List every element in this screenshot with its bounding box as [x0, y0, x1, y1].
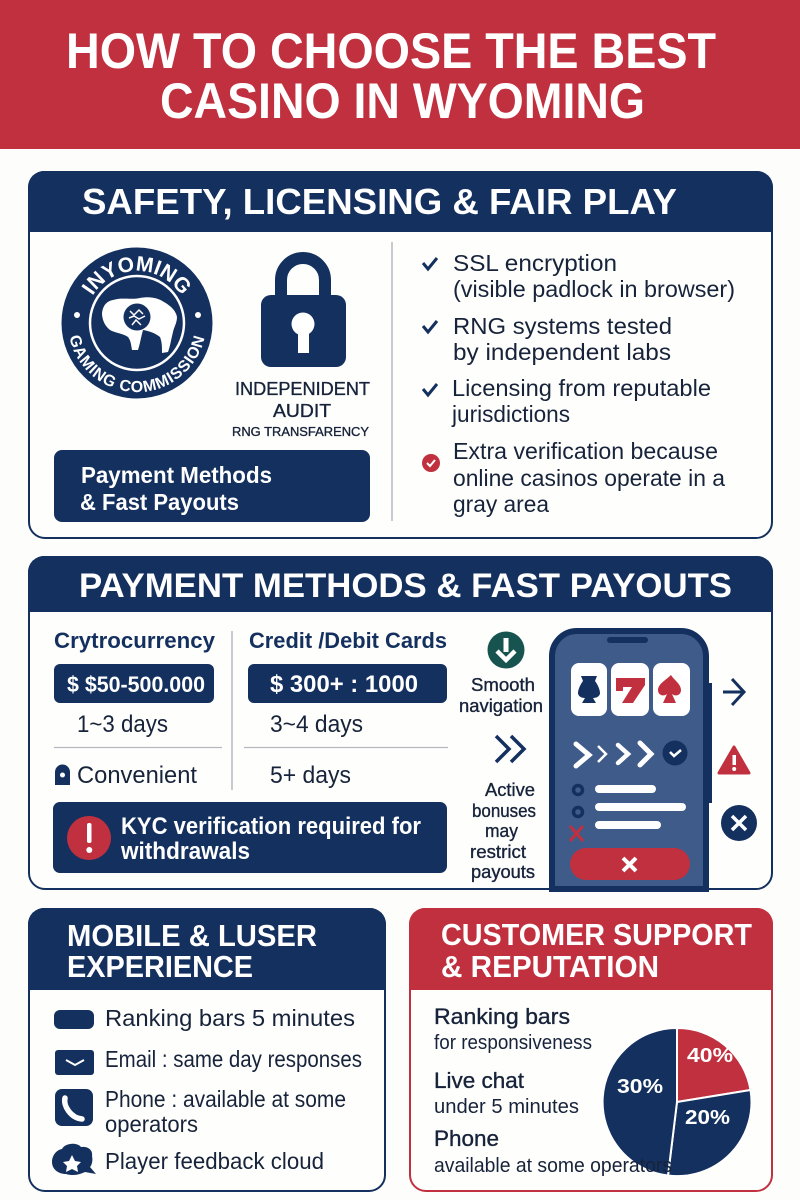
item: extra verification warning: online casinos operate in a	[453, 465, 725, 491]
checklist: safety points	[422, 250, 735, 517]
heading: safety: SAFETY, LICENSING & FAIR PLAY	[82, 181, 677, 222]
item: licensing: jurisdictions	[451, 401, 570, 427]
icon: warning triangle	[719, 747, 749, 773]
text: phone	[434, 1126, 672, 1177]
item: phone: operators	[105, 1111, 198, 1137]
text: ranking bars: Ranking bars	[434, 1004, 570, 1029]
heading: safety	[28, 171, 773, 232]
item: extra verification warning	[422, 438, 725, 517]
icon: small lock	[55, 765, 70, 785]
text: independent audit: AUDIT	[273, 401, 331, 421]
text: active bonuses	[470, 780, 536, 882]
item: licensing	[423, 375, 711, 427]
text: smooth navigation: Smooth	[471, 675, 535, 695]
item: SSL encryption: (visible padlock in browser)	[453, 276, 735, 302]
red cancel button	[570, 848, 690, 880]
text: phone: Phone	[434, 1126, 499, 1151]
column: cryptocurrency: Convenient	[77, 762, 197, 789]
icon: double chevron	[496, 736, 524, 762]
column: credit and debit cards: 5+ days	[270, 762, 351, 789]
item: phone	[55, 1086, 346, 1137]
text: independent audit: INDEPENIDENT	[235, 379, 370, 399]
column: credit and debit cards: Credit /Debit Cards	[249, 628, 447, 653]
text: ranking bars	[434, 1004, 592, 1054]
icon: smooth navigation	[488, 632, 524, 668]
item: licensing: Licensing from reputable	[452, 375, 711, 401]
heading: customer support	[409, 908, 773, 990]
item: email: Email : same day responses	[105, 1046, 362, 1072]
icon: arrow	[723, 679, 744, 705]
text: live chat: under 5 minutes	[434, 1096, 579, 1118]
text: ranking bars: for responsiveness	[434, 1032, 592, 1054]
callout: KYC verification	[53, 802, 447, 873]
text: live chat	[434, 1068, 579, 1118]
progress chevrons	[576, 740, 688, 766]
pie chart: 40%	[687, 1045, 733, 1067]
callout: payment methods and fast payouts: & Fast Payouts	[80, 489, 239, 515]
item: ranking bars: Ranking bars 5 minutes	[105, 1005, 355, 1031]
text: smooth navigation: navigation	[459, 696, 543, 716]
text: active bonuses: Active	[485, 780, 535, 800]
icon: Wyoming gaming commission seal	[62, 248, 212, 398]
item: extra verification warning: Extra verification because	[453, 438, 718, 464]
text: smooth navigation	[459, 675, 543, 716]
text: live chat: Live chat	[434, 1068, 524, 1093]
column: cryptocurrency	[54, 628, 222, 789]
pie chart: 30%	[617, 1076, 663, 1098]
icon: Wyoming gaming commission seal: INYOMING	[81, 256, 190, 295]
pie chart	[603, 1028, 751, 1176]
heading: payments: PAYMENT METHODS & FAST PAYOUTS	[79, 567, 732, 605]
title banner: HOW TO CHOOSE THE BEST	[66, 23, 716, 79]
panel: payment methods and fast payouts	[28, 556, 773, 889]
title banner: CASINO IN WYOMING	[160, 73, 645, 129]
text: active bonuses: payouts	[471, 862, 535, 882]
column: credit and debit cards: $ 300+ : 1000	[270, 671, 418, 698]
icon: close circle	[721, 805, 757, 841]
heading: customer support: CUSTOMER SUPPORT	[441, 917, 752, 952]
item: email	[55, 1046, 362, 1075]
icon: padlock	[261, 258, 346, 367]
callout: payment methods and fast payouts: Payment Methods	[81, 462, 272, 488]
text: independent audit	[232, 379, 370, 439]
text: active bonuses: may	[485, 821, 518, 841]
title banner	[0, 0, 800, 149]
pie chart: 20%	[685, 1107, 730, 1129]
heading: mobile: EXPERIENCE	[67, 949, 253, 984]
column: cryptocurrency: 1~3 days	[77, 711, 168, 738]
bullet lines	[570, 785, 686, 841]
column: credit and debit cards	[244, 628, 448, 789]
heading: customer support: & REPUTATION	[441, 949, 659, 984]
icon: Wyoming gaming commission seal: GAMING COMMISSION	[70, 336, 204, 392]
item: player feedback	[52, 1144, 324, 1175]
callout: KYC verification: withdrawals	[120, 838, 250, 865]
column: cryptocurrency: Crytrocurrency	[54, 628, 216, 653]
item: RNG systems: by independent labs	[453, 339, 671, 365]
slot reels	[571, 663, 690, 716]
panel: customer support and reputation	[409, 908, 773, 1191]
item: phone: Phone : available at some	[105, 1086, 346, 1112]
heading: mobile	[28, 908, 386, 990]
phone mockup	[552, 631, 712, 889]
callout: payment methods and fast payouts	[54, 450, 370, 522]
item: SSL encryption	[423, 250, 735, 302]
column: credit and debit cards: 3~4 days	[270, 711, 363, 738]
panel: mobile and user experience	[28, 908, 386, 1191]
item: player feedback: Player feedback cloud	[105, 1148, 324, 1174]
item: RNG systems	[423, 313, 672, 365]
item: extra verification warning: gray area	[453, 491, 549, 517]
heading: payments	[28, 556, 773, 612]
item: RNG systems: RNG systems tested	[453, 313, 672, 339]
item: SSL encryption: SSL encryption	[453, 250, 617, 276]
text: independent audit: RNG TRANSFARENCY	[232, 424, 369, 439]
column: cryptocurrency: $ $50-500.000	[67, 672, 205, 697]
heading: mobile: MOBILE & LUSER	[67, 918, 317, 953]
panel: safety, licensing and fair play	[28, 171, 773, 539]
text: active bonuses: bonuses	[472, 801, 536, 821]
text: phone: available at some operators	[434, 1155, 672, 1177]
text: active bonuses: restrict	[470, 842, 526, 862]
callout: KYC verification: KYC verification required for	[121, 813, 421, 840]
